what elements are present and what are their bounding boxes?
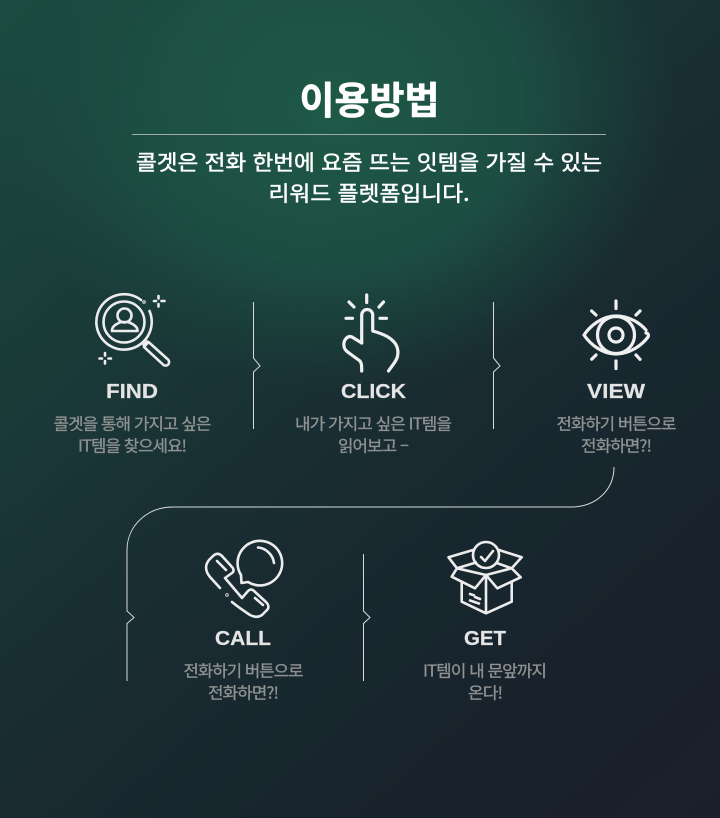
icon: magnifier with person: [96, 294, 169, 366]
title divider: [132, 134, 606, 135]
description: 읽어보고 –: [338, 432, 408, 456]
description: IT템을 찾으세요!: [78, 432, 186, 456]
icon: tapping hand: [344, 295, 398, 371]
subtitle: [136, 147, 602, 208]
heading: CALL: [215, 628, 271, 650]
icon: eye: [584, 301, 648, 368]
arrow divider 2: [494, 302, 500, 429]
description: [556, 410, 676, 456]
step: FIND: [54, 294, 211, 456]
icon: phone and speech bubble: [206, 541, 282, 617]
arrow divider 1: [254, 302, 260, 429]
icon: open box with check: [448, 542, 522, 613]
title: 이용방법: [300, 81, 440, 123]
connector line from VIEW to CALL: [127, 467, 614, 681]
heading: CLICK: [341, 381, 407, 403]
heading: GET: [464, 628, 506, 650]
subtitle: 콜겟은 전화 한번에 요즘 뜨는 잇템을 가질 수 있는: [136, 147, 602, 177]
description: [295, 410, 451, 456]
description: [184, 658, 303, 704]
description: 내가 가지고 싶은 IT템을: [295, 410, 451, 434]
step: CLICK: [295, 295, 451, 456]
description: 콜겟을 통해 가지고 싶은: [54, 410, 211, 434]
step: CALL: [184, 541, 303, 704]
description: 전화하면?!: [208, 680, 278, 704]
arrow divider 3: [364, 554, 370, 681]
description: 전화하면?!: [581, 432, 651, 456]
description: IT템이 내 문앞까지: [423, 658, 546, 682]
heading: FIND: [106, 381, 158, 403]
description: 온다!: [468, 680, 502, 704]
step: VIEW: [556, 301, 676, 456]
step: GET: [423, 542, 546, 704]
description: 전화하기 버튼으로: [184, 658, 303, 682]
description: [423, 658, 546, 704]
heading: VIEW: [587, 381, 645, 403]
description: 전화하기 버튼으로: [556, 410, 676, 434]
description: [54, 410, 211, 456]
subtitle: 리워드 플렛폼입니다.: [268, 178, 470, 208]
